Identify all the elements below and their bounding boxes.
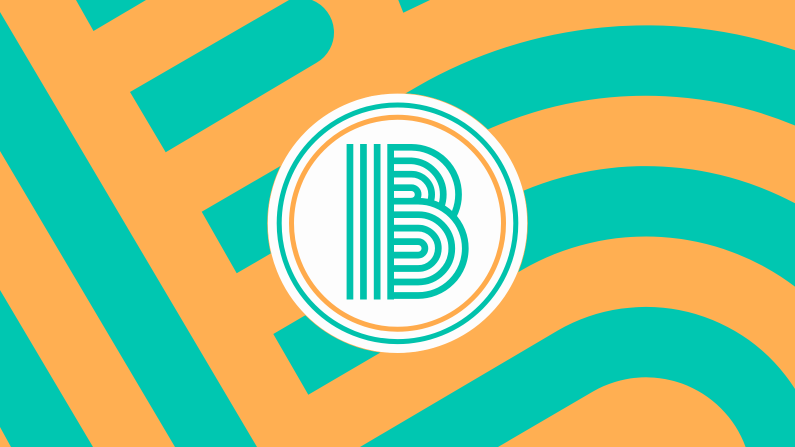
diagonal stripe: main xyxy=(0,12,257,447)
letter: stem xyxy=(387,144,394,300)
corner shape: top centre xyxy=(398,0,430,13)
badge: teal ring xyxy=(279,105,516,342)
curved stripe: inner xyxy=(360,307,795,447)
badge: orange ring xyxy=(292,117,504,329)
letter: lower bowl mask xyxy=(394,201,465,296)
capsule stripe with rounded end xyxy=(130,0,334,152)
logo badge xyxy=(268,93,528,353)
logo: striped letter B xyxy=(347,144,465,300)
badge: white disc xyxy=(268,93,528,353)
corner shape: top left xyxy=(76,0,146,31)
letter: three vertical bars xyxy=(347,144,380,300)
letter: lower bowl xyxy=(390,201,465,296)
letter: upper bowl xyxy=(390,147,459,242)
diagonal stripe: bottom left xyxy=(0,290,93,447)
curved stripe: middle xyxy=(273,166,795,395)
curved stripe: outer xyxy=(202,25,795,273)
